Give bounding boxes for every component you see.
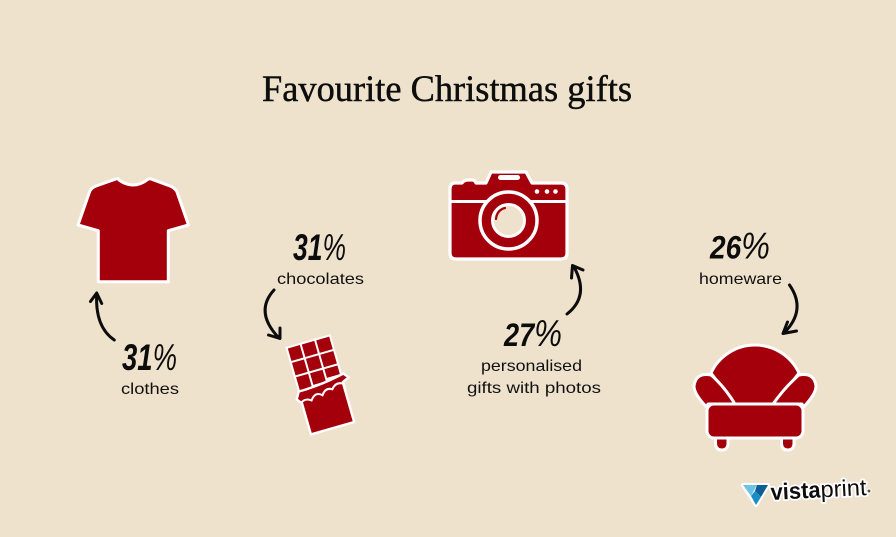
stat: personalised gifts with photos: 27% bbox=[503, 313, 562, 354]
stat: clothes: clothes bbox=[121, 381, 179, 398]
stat: chocolates bbox=[277, 227, 364, 288]
icon: t-shirt bbox=[78, 179, 188, 282]
left arm bbox=[694, 374, 735, 407]
icon: chocolate bar bbox=[282, 333, 361, 436]
stat: chocolates: 31% bbox=[293, 227, 346, 268]
stat: clothes bbox=[121, 337, 179, 398]
stat: homeware: 26% bbox=[709, 226, 770, 266]
icon: armchair bbox=[694, 345, 816, 450]
chair back bbox=[711, 345, 799, 404]
stat: personalised gifts with photos bbox=[467, 313, 601, 397]
icon: camera bbox=[450, 172, 567, 259]
stat: clothes: 31% bbox=[122, 337, 177, 378]
stat: homeware bbox=[699, 226, 782, 288]
logo: vistaprint bbox=[743, 474, 871, 505]
arrow: homeware to armchair bbox=[783, 285, 797, 334]
stat: chocolates: chocolates bbox=[277, 271, 364, 288]
title: Favourite Christmas gifts bbox=[262, 69, 632, 110]
logo: vistaprint: print bbox=[820, 474, 868, 502]
stat: personalised gifts with photos: personalised bbox=[481, 358, 582, 375]
stat: homeware: homeware bbox=[699, 271, 782, 288]
stat: personalised gifts with photos: gifts with photos bbox=[467, 380, 601, 397]
right arm bbox=[773, 374, 816, 407]
seat bbox=[707, 404, 803, 438]
arrow: chocolates to bar bbox=[265, 290, 280, 338]
logo: vistaprint: vista bbox=[770, 476, 821, 505]
arrow: clothes to t-shirt bbox=[90, 293, 114, 340]
feet bbox=[716, 434, 728, 450]
arrow: photos to camera bbox=[567, 266, 583, 314]
